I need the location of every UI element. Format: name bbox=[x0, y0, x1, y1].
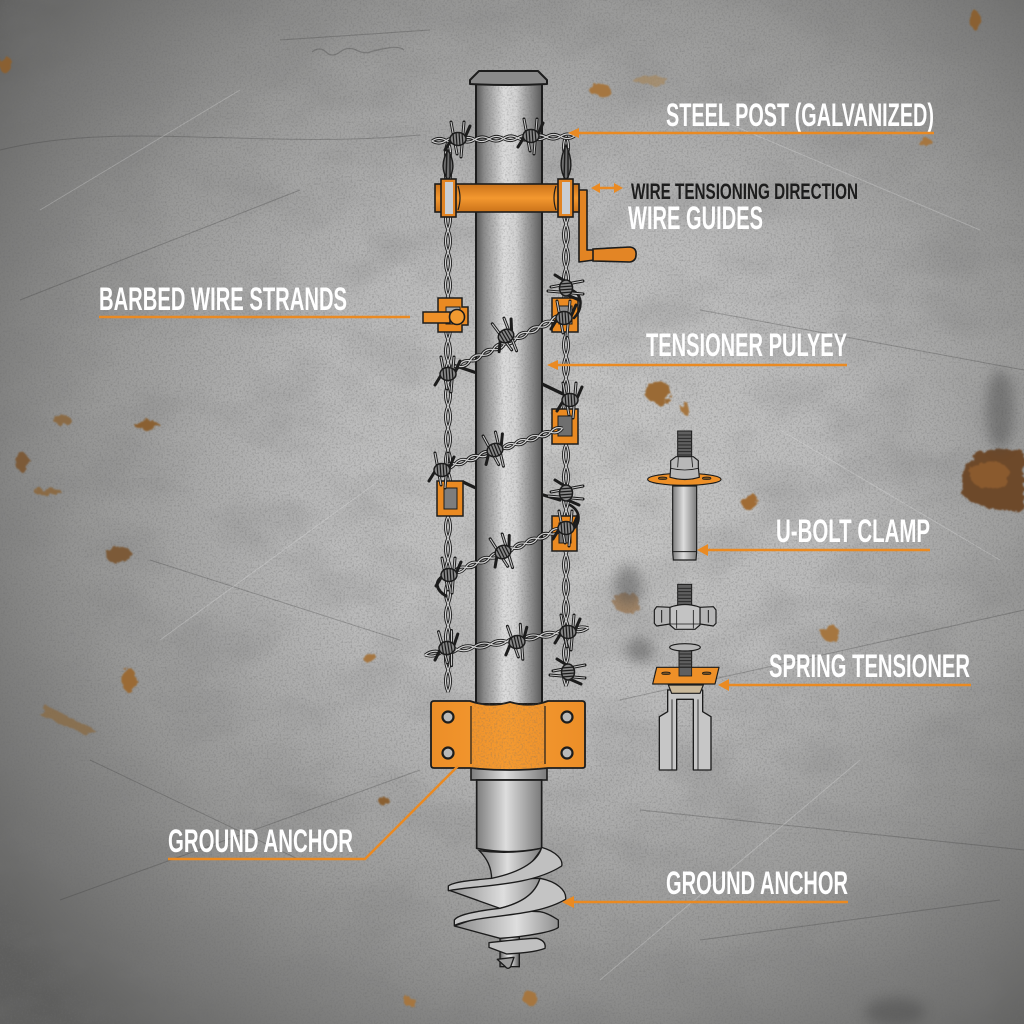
barbs bbox=[429, 119, 585, 684]
crank grip bbox=[593, 247, 636, 262]
lower collar bbox=[471, 768, 547, 780]
post shaft bbox=[476, 84, 542, 704]
core shaft bbox=[500, 880, 519, 967]
ground anchor auger bbox=[448, 780, 566, 968]
post cap bbox=[470, 71, 547, 85]
crank arm bbox=[579, 190, 594, 262]
label: spring tensioner bbox=[718, 648, 971, 691]
right block 2 bbox=[552, 409, 578, 444]
bolt head bbox=[670, 644, 700, 651]
barbed wire strands bbox=[425, 119, 589, 684]
label: tensioner pulley: TENSIONER PULYEY bbox=[646, 327, 847, 363]
label: barbed wire strands: BARBED WIRE STRANDS bbox=[99, 281, 347, 317]
bolt thread bbox=[678, 584, 692, 606]
wings bbox=[654, 607, 716, 626]
diagonal strand 4 bbox=[425, 626, 589, 657]
diagonal strand 3 bbox=[441, 527, 562, 579]
label: ground anchor left: GROUND ANCHOR bbox=[168, 823, 353, 859]
exploded U-bolt clamp part bbox=[648, 431, 721, 560]
orange post clamp bbox=[431, 701, 585, 780]
right guide block bbox=[558, 179, 573, 217]
bolt thread bbox=[679, 651, 692, 674]
auger tip bbox=[497, 957, 514, 968]
diagonal strand 1 bbox=[446, 314, 563, 374]
orange bar bbox=[435, 184, 579, 212]
right block 3 bbox=[552, 516, 577, 551]
hex nut bbox=[670, 457, 699, 479]
label: u-bolt clamp bbox=[697, 513, 930, 556]
fork body bbox=[659, 690, 711, 770]
middle helix flight bbox=[454, 910, 558, 938]
wire stubs behind post bbox=[453, 365, 563, 500]
exploded wing nut part bbox=[654, 584, 716, 629]
exploded spring tensioner part bbox=[653, 644, 719, 770]
label: ground anchor right bbox=[562, 865, 848, 908]
threaded stud bbox=[678, 431, 692, 458]
diagonal strand 2 bbox=[442, 426, 563, 470]
guide bar with crank handle bbox=[435, 179, 636, 262]
vertical twisted wires bbox=[443, 136, 571, 692]
clamp body bbox=[431, 701, 585, 770]
wire guide blocks bbox=[423, 298, 578, 551]
label: steel post bbox=[568, 97, 934, 138]
upper helix flight bbox=[448, 878, 540, 908]
left block bbox=[437, 481, 463, 516]
wire hook right bbox=[570, 290, 580, 530]
label: tensioner pulley bbox=[547, 327, 847, 370]
direction arrow and caption bbox=[591, 179, 858, 204]
label: u-bolt clamp: U-BOLT CLAMP bbox=[776, 513, 930, 549]
lower shaft bbox=[477, 780, 542, 852]
dark grey stains bbox=[614, 370, 1014, 1024]
label: wire guides: WIRE GUIDES bbox=[628, 200, 763, 236]
spring washer bbox=[668, 685, 703, 693]
nut body bbox=[670, 604, 700, 629]
right block 1 bbox=[552, 298, 578, 332]
tube bbox=[673, 486, 697, 560]
left pulley tensioner bbox=[423, 298, 468, 332]
orange flange bbox=[648, 473, 721, 485]
top strand bbox=[432, 134, 575, 143]
wire hook bbox=[437, 576, 446, 596]
direction arrow and caption: WIRE TENSIONING DIRECTION bbox=[631, 179, 858, 204]
steel post bbox=[470, 71, 547, 704]
orange plate bbox=[653, 667, 719, 684]
tapered neck bbox=[479, 848, 542, 880]
label: ground anchor right: GROUND ANCHOR bbox=[666, 865, 848, 901]
label: ground anchor left bbox=[168, 766, 458, 859]
lower helix flight bbox=[489, 938, 545, 954]
left guide block bbox=[441, 179, 456, 217]
clamp holes bbox=[442, 712, 572, 758]
